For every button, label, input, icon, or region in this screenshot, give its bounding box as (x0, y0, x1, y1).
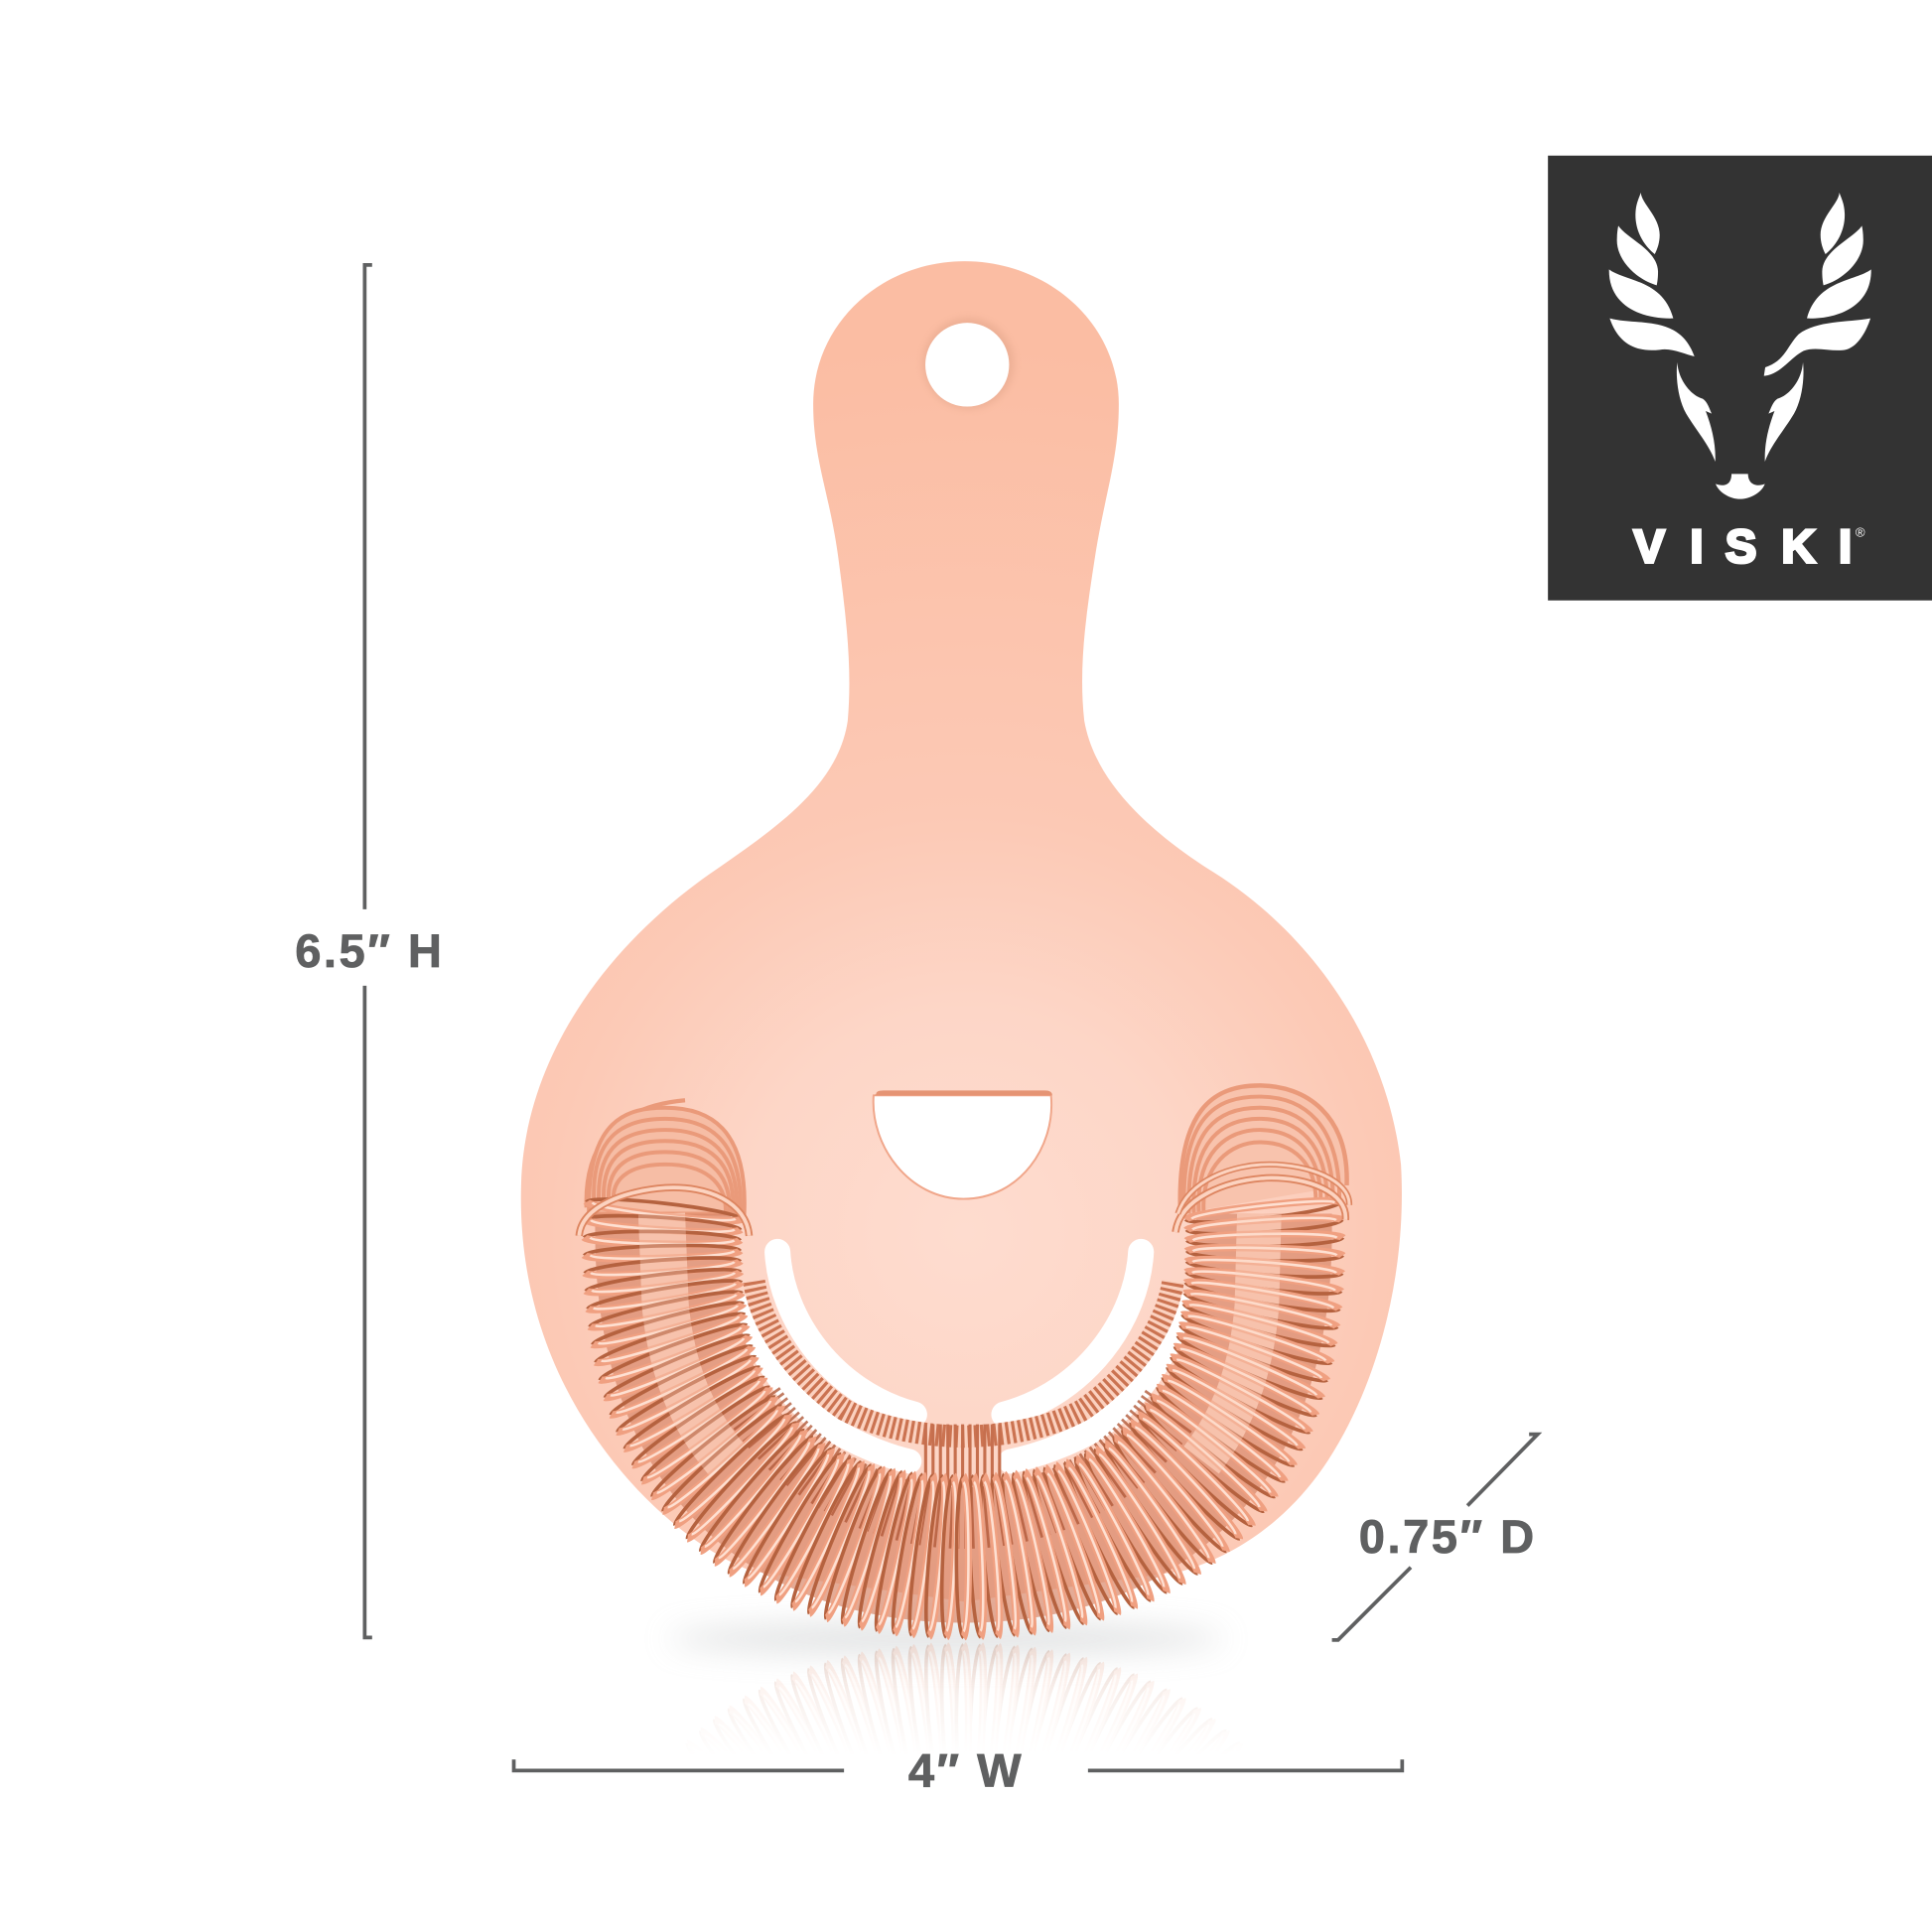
coil backing (663, 1213, 1264, 1555)
logo background (1548, 156, 1932, 601)
left coil top loops (587, 1100, 745, 1213)
coil dark inner band (755, 1405, 1173, 1518)
icon: left antler (1609, 193, 1716, 462)
icon: nose (1716, 474, 1765, 499)
strainer plate (521, 261, 1402, 1601)
logo panel: Viski (1548, 156, 1932, 601)
coil end loops (579, 1165, 1349, 1236)
coil right spine sheen (1201, 1213, 1259, 1460)
strainer product illustration (521, 261, 1402, 1891)
logo wordmark: VISKI (1633, 521, 1852, 574)
coil wires (584, 1194, 1343, 1637)
center stem wires (924, 1431, 1004, 1482)
depth line (1332, 1435, 1538, 1640)
width line (514, 1759, 1402, 1770)
inner fine coil (755, 1282, 1173, 1437)
right coil top loops (1180, 1085, 1347, 1213)
height label: 6.5″ H (295, 924, 444, 977)
half moon cutout (874, 1090, 1052, 1199)
main coil spring (584, 1194, 1343, 1637)
coil reflection (713, 1642, 1212, 1726)
depth label: 0.75″ D (1359, 1510, 1537, 1563)
logo artwork (1609, 193, 1871, 574)
coil left flat spine (661, 1213, 727, 1460)
coil left spine sheen (661, 1213, 727, 1460)
registered mark: ® (1856, 525, 1865, 540)
hanging hole (923, 318, 1014, 409)
icon: right antler (1764, 193, 1871, 462)
width label: 4″ W (908, 1744, 1024, 1797)
inner slots (748, 1252, 1179, 1461)
dimension: depth (1332, 1435, 1538, 1640)
floor shadow (669, 1622, 1223, 1655)
dimension: width (514, 1744, 1402, 1797)
dimension: height (295, 265, 444, 1637)
height line (364, 265, 372, 1637)
coil right flat spine (1201, 1213, 1259, 1460)
